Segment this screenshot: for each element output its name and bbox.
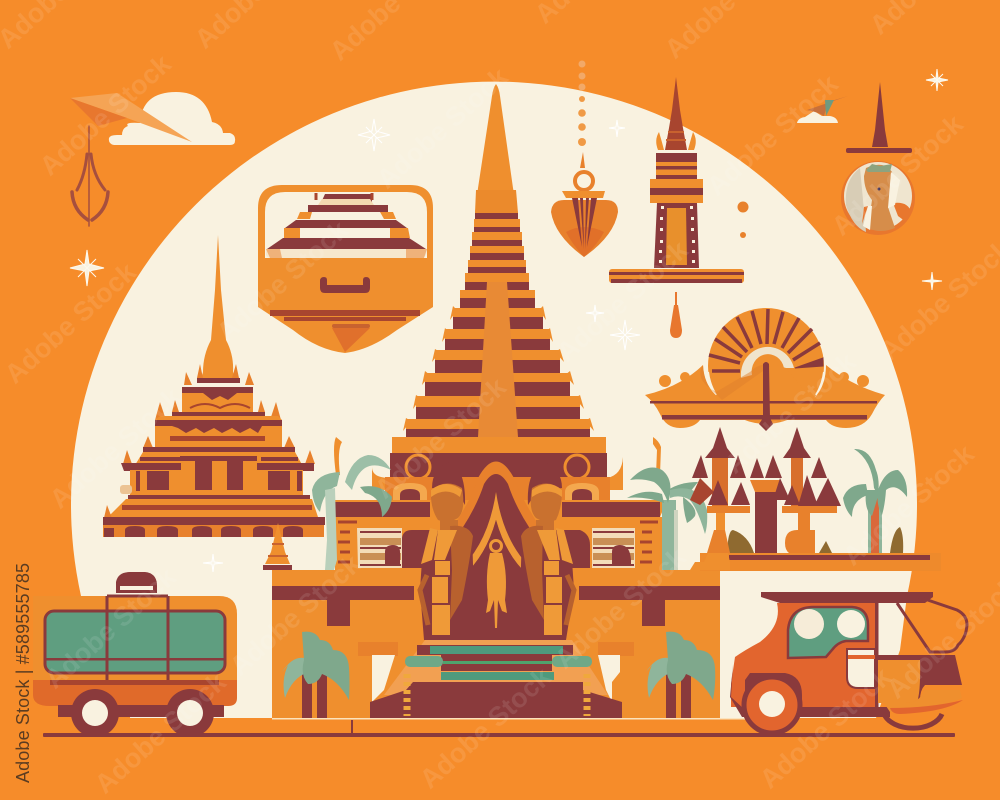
watermark: Adobe Stock	[371, 61, 514, 194]
right spire garden	[690, 427, 903, 553]
temple hall	[333, 500, 665, 572]
icon: small bird and cloud	[797, 96, 848, 123]
central shrine with figures	[420, 462, 574, 640]
watermark: Adobe Stock	[549, 541, 692, 674]
bus	[33, 572, 237, 737]
watermark: Adobe Stock	[211, 214, 354, 347]
central pillar	[750, 455, 782, 553]
icon: suitcase shaped temple badge	[258, 185, 433, 353]
watermark: Adobe Stock	[0, 256, 142, 389]
watermark: Adobe Stock	[34, 48, 177, 181]
tree two	[773, 427, 841, 553]
watermark: Adobe Stock	[754, 661, 897, 794]
watermark: Adobe Stock	[551, 234, 694, 367]
icon: spire with monkey medallion	[841, 82, 915, 235]
right guardian figure	[520, 462, 574, 640]
front palm frond left	[325, 486, 392, 570]
watermark: Adobe Stock	[89, 666, 232, 799]
sparkles	[70, 69, 948, 572]
icon: tower on platform	[609, 77, 748, 338]
left temple	[103, 235, 325, 537]
left palm tree behind hall	[312, 437, 391, 512]
right fan pavilion	[645, 308, 885, 431]
right ledge	[690, 553, 941, 571]
watermark: Adobe Stock	[369, 371, 512, 504]
sun disc	[71, 82, 917, 718]
palm tree: lower right	[646, 632, 715, 718]
watermark: Adobe Stock	[414, 661, 557, 794]
right palm tree by hall	[627, 437, 707, 570]
central stupa	[372, 84, 623, 500]
icon: hanging bead ornament	[551, 60, 618, 257]
tuk-tuk	[730, 592, 967, 733]
palm tree: far right	[843, 449, 907, 553]
watermark: Adobe Stock	[719, 346, 862, 479]
icon: hanging leaf ornament	[72, 126, 108, 226]
watermark: Adobe Stock	[826, 108, 969, 241]
palm tree: lower left	[282, 632, 350, 718]
stairs	[370, 640, 622, 718]
watermark: Adobe Stock	[44, 381, 187, 514]
ground strip	[130, 718, 910, 734]
watermark: Adobe Stock	[701, 68, 844, 201]
watermark: Adobe Stock	[224, 548, 367, 681]
stock id: Adobe Stock | #589555785	[13, 563, 33, 783]
watermark: Adobe Stock	[39, 561, 182, 694]
cloud and paper kite	[70, 92, 235, 145]
tree one	[690, 427, 750, 553]
base building	[263, 523, 720, 718]
watermark: Adobe Stock	[837, 438, 980, 571]
left guardian figure	[420, 462, 474, 640]
ground line	[43, 733, 955, 737]
